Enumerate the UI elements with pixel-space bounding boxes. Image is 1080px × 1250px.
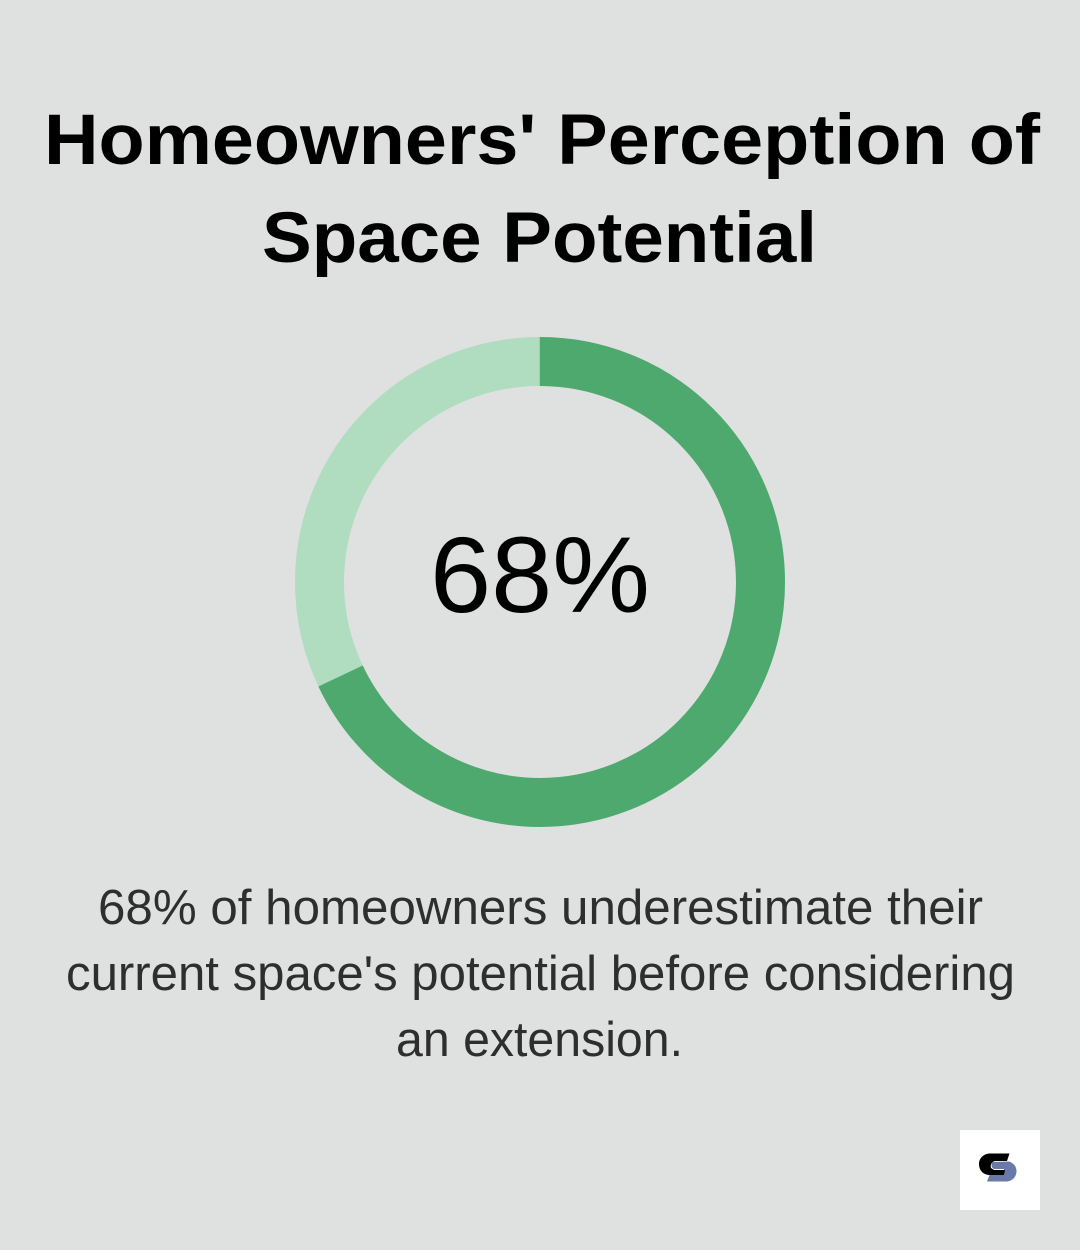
- title: Homeowners' Perception of: [44, 101, 1040, 180]
- logo badge: [960, 1130, 1040, 1210]
- donut track: remaining 32%: [320, 362, 760, 802]
- logo mark: blue lower stroke: [987, 1162, 1016, 1182]
- donut arc: 68%: [320, 362, 760, 802]
- center value: 68%: [430, 514, 650, 635]
- logo mark: black upper stroke: [979, 1154, 1010, 1175]
- description text: current space's potential before considering: [66, 947, 1015, 1001]
- description text: 68% of homeowners underestimate their: [98, 881, 983, 935]
- title: Space Potential: [262, 199, 817, 278]
- donut chart: 68%: [320, 362, 760, 802]
- title: [44, 101, 1040, 278]
- description text: [66, 881, 1015, 1067]
- description text: an extension.: [396, 1013, 683, 1067]
